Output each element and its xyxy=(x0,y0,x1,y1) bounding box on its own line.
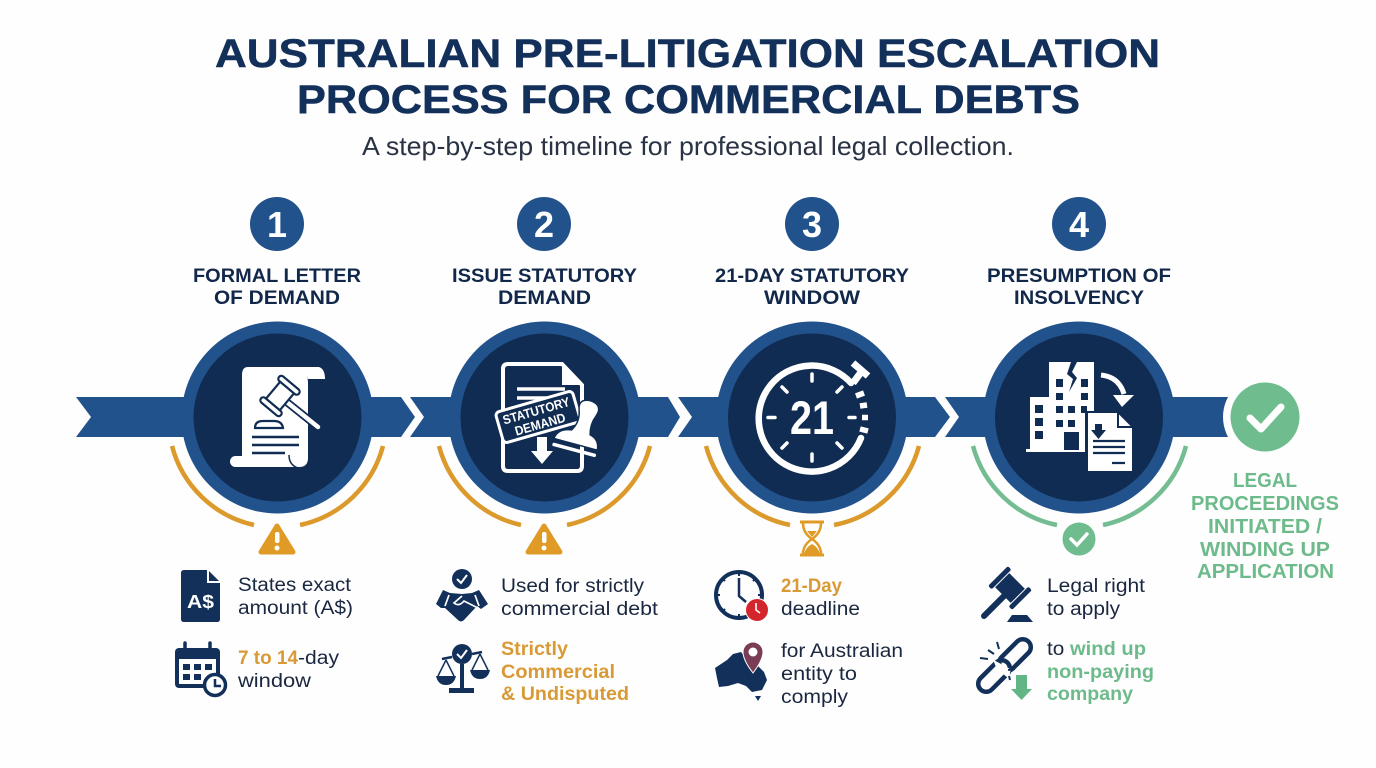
step 3 item: deadline xyxy=(716,572,860,622)
step 3 item: deadline: 21-Day xyxy=(781,576,842,597)
step 2 medallion xyxy=(448,322,640,514)
icon: scroll with gavel xyxy=(230,367,325,468)
step 2 heading: ISSUE STATUTORY xyxy=(452,266,637,287)
icon: outcome check xyxy=(1223,375,1307,459)
step 3 item: Australian entity: comply xyxy=(781,687,849,708)
step 2 arc xyxy=(439,446,650,525)
icon: stamped statutory demand: DEMAND xyxy=(513,410,567,439)
step 2 heading: DEMAND xyxy=(498,288,591,309)
icon: 21-day stopwatch xyxy=(759,363,868,472)
step 1 item: amount: amount (A$) xyxy=(238,598,353,619)
title: PROCESS FOR COMMERCIAL DEBTS xyxy=(297,78,1080,122)
step 2 item: undisputed: Strictly xyxy=(501,639,568,660)
step 4 item: legal right xyxy=(984,566,1146,622)
step 2 number: 2 xyxy=(534,204,554,245)
icon: check badge xyxy=(1062,522,1096,556)
step 1 number: 1 xyxy=(267,204,287,245)
icon: warning xyxy=(528,526,560,552)
step 3 xyxy=(706,197,919,708)
timeline ribbon xyxy=(76,397,1240,437)
step 2 item: undisputed: Commercial xyxy=(501,662,615,683)
step 4 number xyxy=(1052,197,1106,251)
step 4 medallion xyxy=(983,322,1175,514)
step 3 item: Australian entity xyxy=(715,641,903,708)
step 1 item: window: 7 to 14-day xyxy=(238,648,340,669)
icon: stamped statutory demand xyxy=(495,364,609,471)
title: AUSTRALIAN PRE-LITIGATION ESCALATION xyxy=(215,32,1160,76)
step 2 heading xyxy=(452,266,637,309)
step 2 item: undisputed xyxy=(436,639,629,705)
outcome text: WINDING UP xyxy=(1200,539,1330,561)
step 2 item: commercial debt: Used for strictly xyxy=(501,576,645,597)
step 4 heading: PRESUMPTION OF xyxy=(987,266,1171,287)
step 3 medallion xyxy=(716,322,908,514)
step 1 heading: FORMAL LETTER xyxy=(193,266,361,287)
outcome text xyxy=(1191,470,1339,583)
outcome text: LEGAL xyxy=(1233,470,1297,492)
step 2 item: commercial debt xyxy=(436,569,659,622)
step 2 number xyxy=(517,197,571,251)
step 4 arc xyxy=(973,446,1186,525)
step 3 item: deadline: deadline xyxy=(781,599,860,620)
step 2 item: undisputed: & Undisputed xyxy=(501,684,629,705)
step 2 xyxy=(436,197,659,705)
step 3 item: Australian entity: entity to xyxy=(781,664,857,685)
step 4 item: wind up: to wind up xyxy=(1047,639,1146,660)
step 1 item: window: window xyxy=(237,671,311,692)
icon: stamped statutory demand: STATUTORY xyxy=(501,394,572,427)
subtitle: A step-by-step timeline for professional legal collection. xyxy=(362,131,1014,161)
step 4 heading xyxy=(987,266,1171,309)
step 3 arc xyxy=(706,446,919,525)
final outcome xyxy=(1191,375,1339,583)
icon: 21-day stopwatch: 21 xyxy=(790,391,834,444)
outcome text: INITIATED / xyxy=(1208,516,1322,538)
step 4 number: 4 xyxy=(1069,204,1089,245)
step 1 xyxy=(172,197,383,696)
step 3 heading: WINDOW xyxy=(764,288,860,309)
step 1 item: amount xyxy=(181,570,353,622)
step 4 item: wind up xyxy=(975,636,1154,705)
step 4 item: wind up: non-paying xyxy=(1047,662,1154,683)
step 4 item: legal right: Legal right xyxy=(1047,576,1146,597)
step 3 heading xyxy=(715,266,909,309)
step 1 medallion xyxy=(182,322,374,514)
step 3 number: 3 xyxy=(802,204,822,245)
step 4 item: wind up: company xyxy=(1047,684,1133,705)
step 1 item: window xyxy=(175,643,340,696)
outcome text: PROCEEDINGS xyxy=(1191,493,1339,515)
step 1 arc xyxy=(172,446,383,525)
step 1 item: amount: A$ xyxy=(187,592,214,612)
step 4 item: legal right: to apply xyxy=(1047,599,1121,620)
icon: collapsing building and document xyxy=(1026,362,1134,472)
icon: hourglass xyxy=(800,522,824,555)
step 3 heading: 21-DAY STATUTORY xyxy=(715,266,909,287)
step 4 xyxy=(973,197,1186,705)
step 3 item: Australian entity: for Australian xyxy=(781,641,903,662)
step 3 number xyxy=(785,197,839,251)
step 4 heading: INSOLVENCY xyxy=(1014,288,1144,309)
step 1 heading xyxy=(193,266,361,309)
step 1 number xyxy=(250,197,304,251)
step 2 item: commercial debt: commercial debt xyxy=(501,599,659,620)
title xyxy=(215,32,1160,122)
icon: warning xyxy=(261,526,293,552)
step 1 heading: OF DEMAND xyxy=(214,288,340,309)
step 1 item: amount: States exact xyxy=(238,575,352,596)
outcome text: APPLICATION xyxy=(1197,561,1334,583)
